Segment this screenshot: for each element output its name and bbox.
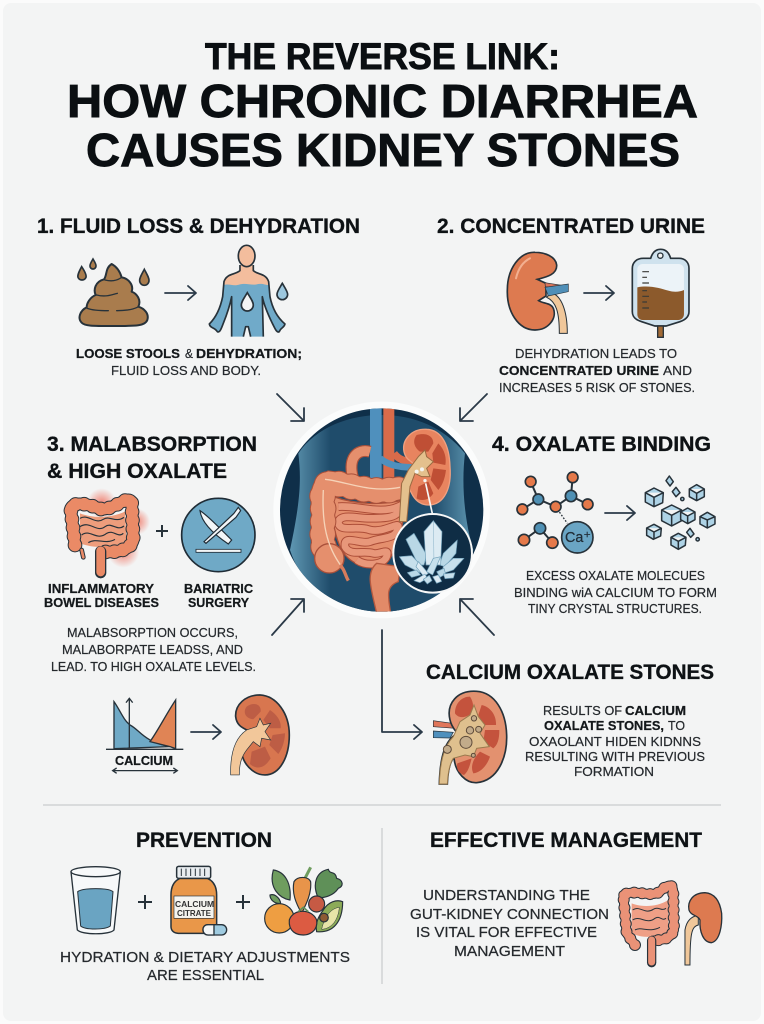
heading: step 3 xyxy=(47,433,257,483)
icon: kidney xyxy=(231,695,289,775)
text: stones description: CALCIUM xyxy=(625,703,686,718)
text: oxalate binding description: TINY CRYSTAL STRUCTURES. xyxy=(528,601,702,616)
labels: bowel diseases and surgery: SURGERY xyxy=(188,595,249,610)
icon: loose stool with droplets xyxy=(78,259,149,326)
text: loose stools description: & xyxy=(185,346,193,361)
icon: calcium citrate bottle xyxy=(171,866,227,935)
panel: 1 fluid loss and dehydration xyxy=(37,215,360,378)
icon: urine collection bag xyxy=(632,249,689,337)
panel: calcium oxalate stones xyxy=(426,661,714,784)
icon: kidney with stones xyxy=(433,691,507,784)
icon: fruit and vegetables xyxy=(265,867,343,935)
plus xyxy=(236,895,250,909)
text: stones description: TO xyxy=(668,718,685,733)
kidney xyxy=(404,429,450,505)
text: concentrated urine description: AND xyxy=(663,363,692,378)
icon: dehydrated body xyxy=(209,245,288,337)
label: calcium citrate: CALCIUM xyxy=(175,900,214,909)
icon: inflamed intestine xyxy=(71,488,150,573)
heading: stones: CALCIUM OXALATE STONES xyxy=(426,661,714,684)
heading: effective management: EFFECTIVE MANAGEMENT xyxy=(430,829,702,852)
icon: intestine xyxy=(623,885,674,963)
label: calcium ion: Ca⁺ xyxy=(565,529,591,546)
text: gut-kidney connection: IS VITAL FOR EFFECTIVE xyxy=(416,925,597,941)
arrow: centre down to calcium oxalate stones xyxy=(382,630,422,739)
heading: step 3: 3. MALABSORPTION xyxy=(47,433,257,456)
text: stones description xyxy=(525,703,705,779)
panel: 4 oxalate binding xyxy=(492,433,717,616)
label: calcium citrate: CITRATE xyxy=(177,909,212,918)
text: malabsorption description xyxy=(51,625,256,674)
text: gut-kidney connection: GUT-KIDNEY CONNECTION xyxy=(410,907,609,923)
text: stones description: RESULTS OF xyxy=(543,703,622,718)
icon: bariatric surgery xyxy=(182,498,255,572)
icon: oxalate molecules with calcium xyxy=(517,472,593,553)
text: oxalate binding description xyxy=(514,568,717,616)
title: CAUSES KIDNEY STONES xyxy=(86,124,680,176)
text: hydration and diet: ARE ESSENTIAL xyxy=(147,968,264,984)
panel: 3 malabsorption and high oxalate xyxy=(44,433,289,775)
title xyxy=(67,36,698,176)
small intestine xyxy=(333,497,404,568)
text: stones description: OXAOLANT HIDEN KIDNNS xyxy=(529,734,701,749)
labels: bowel diseases and surgery: BOWEL DISEASES xyxy=(44,595,159,610)
heading: step 2: 2. CONCENTRATED URINE xyxy=(437,215,705,238)
colon xyxy=(322,483,398,558)
heading: step 4: 4. OXALATE BINDING xyxy=(492,433,711,456)
heading: step 3: & HIGH OXALATE xyxy=(47,460,227,483)
text: oxalate binding description: BINDING wiA CALCIUM TO FORM xyxy=(514,585,717,600)
heading: step 1: 1. FLUID LOSS & DEHYDRATION xyxy=(37,215,360,238)
text: hydration and diet: HYDRATION & DIETARY ADJUSTMENTS xyxy=(60,950,350,966)
text: concentrated urine description: DEHYDRATION LEADS TO xyxy=(515,346,677,361)
text: concentrated urine description: CONCENTRATED URINE xyxy=(499,363,659,378)
text: gut-kidney connection: MANAGEMENT xyxy=(454,944,565,960)
rectum xyxy=(370,563,400,613)
heading: prevention: PREVENTION xyxy=(136,829,272,852)
text: concentrated urine description: INCREASES 5 RISK OF STONES. xyxy=(499,380,695,395)
plus xyxy=(156,525,168,537)
text: loose stools description xyxy=(76,346,302,378)
text: concentrated urine description xyxy=(499,346,695,395)
text: stones description: OXALATE STONES, xyxy=(544,718,664,733)
arrow: kidney to urine bag xyxy=(584,286,614,300)
icon: kidney with vessels xyxy=(507,252,568,333)
text: loose stools description: DEHYDRATION; xyxy=(196,346,302,361)
inset: crystals xyxy=(393,514,472,593)
arrow: chart to kidney xyxy=(191,725,221,739)
labels: bowel diseases and surgery xyxy=(44,581,253,610)
arrows pointing to centre xyxy=(272,394,494,635)
text: gut-kidney connection: UNDERSTANDING THE xyxy=(423,888,590,904)
panel: 2 concentrated urine xyxy=(437,215,705,395)
panel: prevention xyxy=(60,829,350,984)
text: oxalate binding description: EXCESS OXALATE MOLECUES xyxy=(526,568,705,583)
text: malabsorption description: MALABSORPTION OCCURS, xyxy=(67,625,238,640)
text: gut-kidney connection xyxy=(410,888,609,960)
title: HOW CHRONIC DIARRHEA xyxy=(67,75,698,127)
vessels xyxy=(383,407,394,482)
text: stones description: FORMATION xyxy=(574,764,654,779)
label: calcium citrate xyxy=(175,900,214,918)
text: stones description: RESULTING WITH PREVIOUS xyxy=(525,749,705,764)
arrow: stool to body xyxy=(165,286,196,300)
text: malabsorption description: MALABORPATE LEADSS, AND xyxy=(62,642,243,657)
central illustration: gut and kidney xyxy=(280,408,484,612)
icon: kidney xyxy=(685,893,722,965)
icon: glass of water xyxy=(71,867,120,934)
chart: calcium xyxy=(106,698,183,773)
title: THE REVERSE LINK: xyxy=(205,36,560,77)
labels: bowel diseases and surgery: BARIATRIC xyxy=(184,581,253,596)
labels: bowel diseases and surgery: INFLAMMATORY xyxy=(48,581,154,596)
plus xyxy=(138,895,152,909)
text: loose stools description: FLUID LOSS AND BODY. xyxy=(111,363,261,378)
icon: tiny crystals xyxy=(645,476,715,549)
arrow: molecules to crystals xyxy=(605,506,635,520)
text: malabsorption description: LEAD. TO HIGH OXALATE LEVELS. xyxy=(51,659,256,674)
panel: effective management xyxy=(410,829,722,965)
label: calcium: CALCIUM xyxy=(115,753,173,768)
text: hydration and diet xyxy=(60,950,350,984)
text: loose stools description: LOOSE STOOLS xyxy=(76,346,180,361)
